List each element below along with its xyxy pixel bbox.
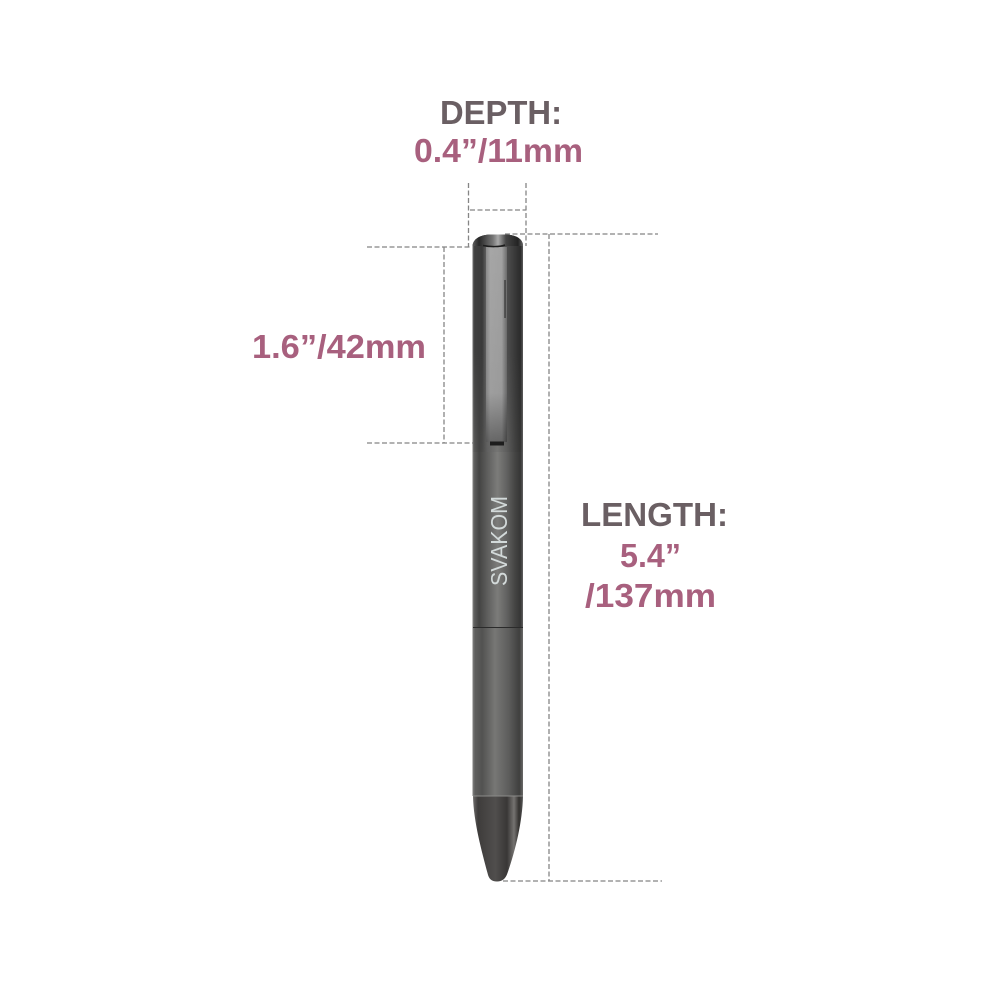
pen: [472, 234, 523, 882]
pen clip: [483, 245, 507, 444]
infographic: pen dimensions: [254, 101, 725, 882]
heading: length label: LENGTH:: [581, 496, 728, 533]
pen brand logo: SVAKOM: [486, 496, 512, 586]
length value: /137mm: [585, 577, 716, 614]
depth dimension lines: [468, 183, 526, 247]
pen cap top: [472, 234, 523, 246]
clip dimension lines: [367, 247, 488, 443]
clip length value: 1.6”/42mm: [252, 328, 426, 365]
pen barrel lower: [472, 628, 523, 796]
length dimension lines: [503, 234, 662, 881]
length value: [585, 537, 716, 614]
pen barrel upper: [472, 234, 523, 628]
length value: 5.4”: [620, 537, 681, 574]
pen tip: [473, 796, 523, 882]
pen shaded clip section: [472, 234, 523, 452]
depth value: 0.4”/11mm: [414, 132, 583, 169]
heading: depth label: DEPTH:: [440, 94, 562, 131]
